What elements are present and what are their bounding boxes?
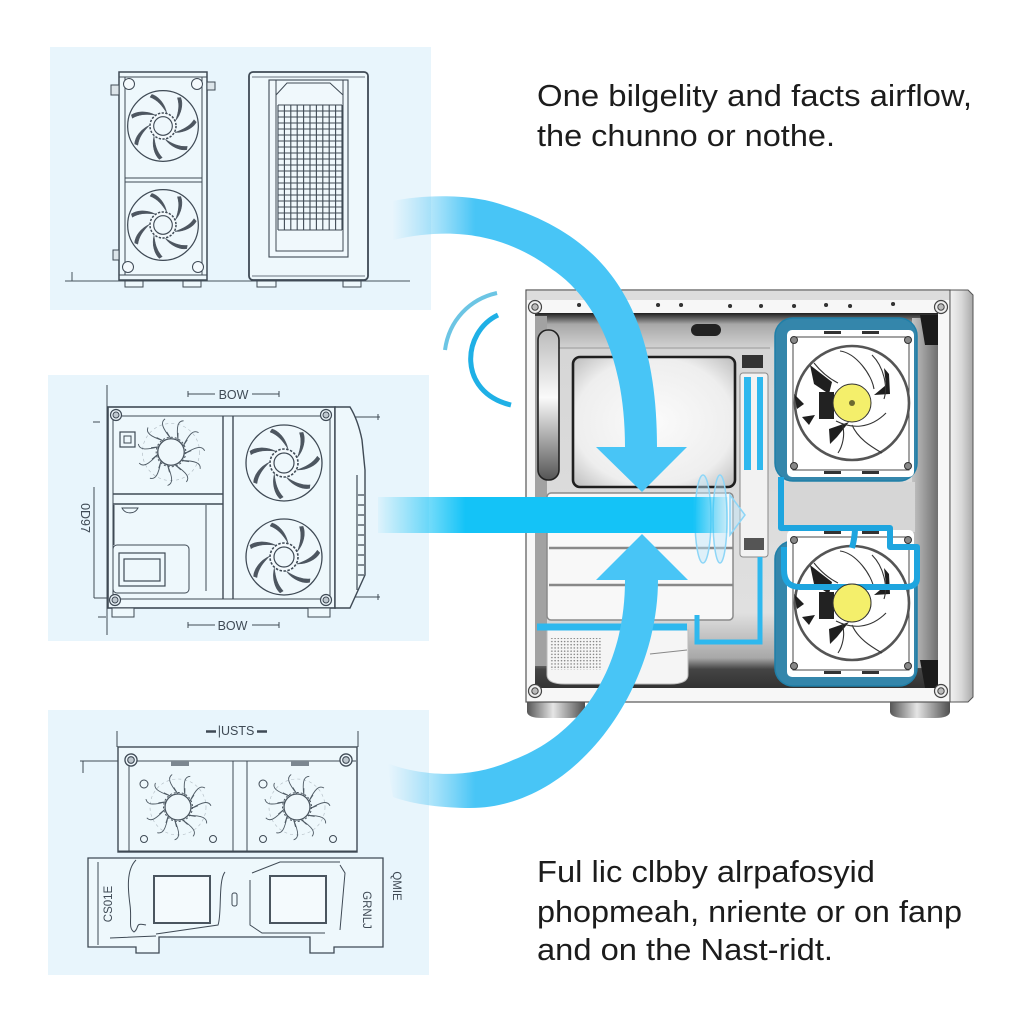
corner shadows (920, 315, 938, 688)
case top rail (527, 291, 949, 300)
interior right wall (912, 318, 938, 668)
arrow: top airflow (393, 196, 687, 492)
panel: side view blueprint (48, 375, 429, 641)
panel: dual fan and base blueprint (48, 710, 429, 975)
case body (526, 290, 950, 702)
right grille unit (249, 72, 368, 287)
left twin-fan unit (111, 72, 215, 287)
heading text top: the chunno or nothe. (537, 119, 835, 153)
connector panel with blue bars (740, 355, 768, 557)
case interior (535, 313, 938, 688)
dimension label top (206, 724, 267, 738)
arrow: horizontal airflow (378, 497, 728, 533)
case feet (527, 702, 950, 718)
ground line (65, 272, 410, 281)
blue pipes (781, 477, 917, 587)
base unit: GRNLJ (360, 891, 372, 929)
base unit: QMIE (390, 871, 402, 901)
dimension label top (188, 388, 279, 402)
base unit (88, 858, 402, 953)
dimension label bottom: BOW (218, 619, 248, 633)
base unit: CS01E (103, 885, 115, 922)
chassis (108, 407, 380, 617)
fan housings (775, 318, 917, 686)
bottom fan (787, 530, 914, 677)
icon: airflow wave arcs (445, 293, 511, 405)
wispy air swirl (695, 475, 745, 563)
dimension label top: |USTS (218, 724, 254, 738)
dimension label left: 0D97 (78, 503, 92, 533)
text block bottom: Ful lic clbby alrpafosyid (537, 855, 875, 889)
yellow hub over pipe (833, 584, 871, 622)
text block bottom: and on the Nast-ridt. (537, 933, 833, 967)
right side panel (950, 290, 973, 702)
dual fan unit (80, 731, 358, 852)
gap panel between fans (781, 482, 915, 532)
dimension label bottom (188, 619, 279, 633)
display panel (573, 357, 735, 487)
disc at left (538, 330, 559, 480)
panel: single tower blueprint (50, 47, 431, 310)
power supply cylinder (547, 630, 688, 684)
divider line on wall (558, 347, 770, 349)
port slot (691, 324, 721, 336)
arrow: bottom airflow (387, 534, 688, 808)
text block bottom: phopmeah, nriente or on fanp (537, 895, 962, 929)
frame screws (528, 300, 948, 698)
dimension label top: BOW (219, 388, 249, 402)
dimension label left (78, 385, 108, 635)
interior left strip (535, 316, 547, 666)
computer case (526, 290, 973, 718)
blue cable lines (537, 557, 760, 642)
drive bays (547, 493, 733, 620)
top fan (787, 330, 914, 477)
heading text top: One bilgelity and facts airflow, (537, 79, 972, 113)
